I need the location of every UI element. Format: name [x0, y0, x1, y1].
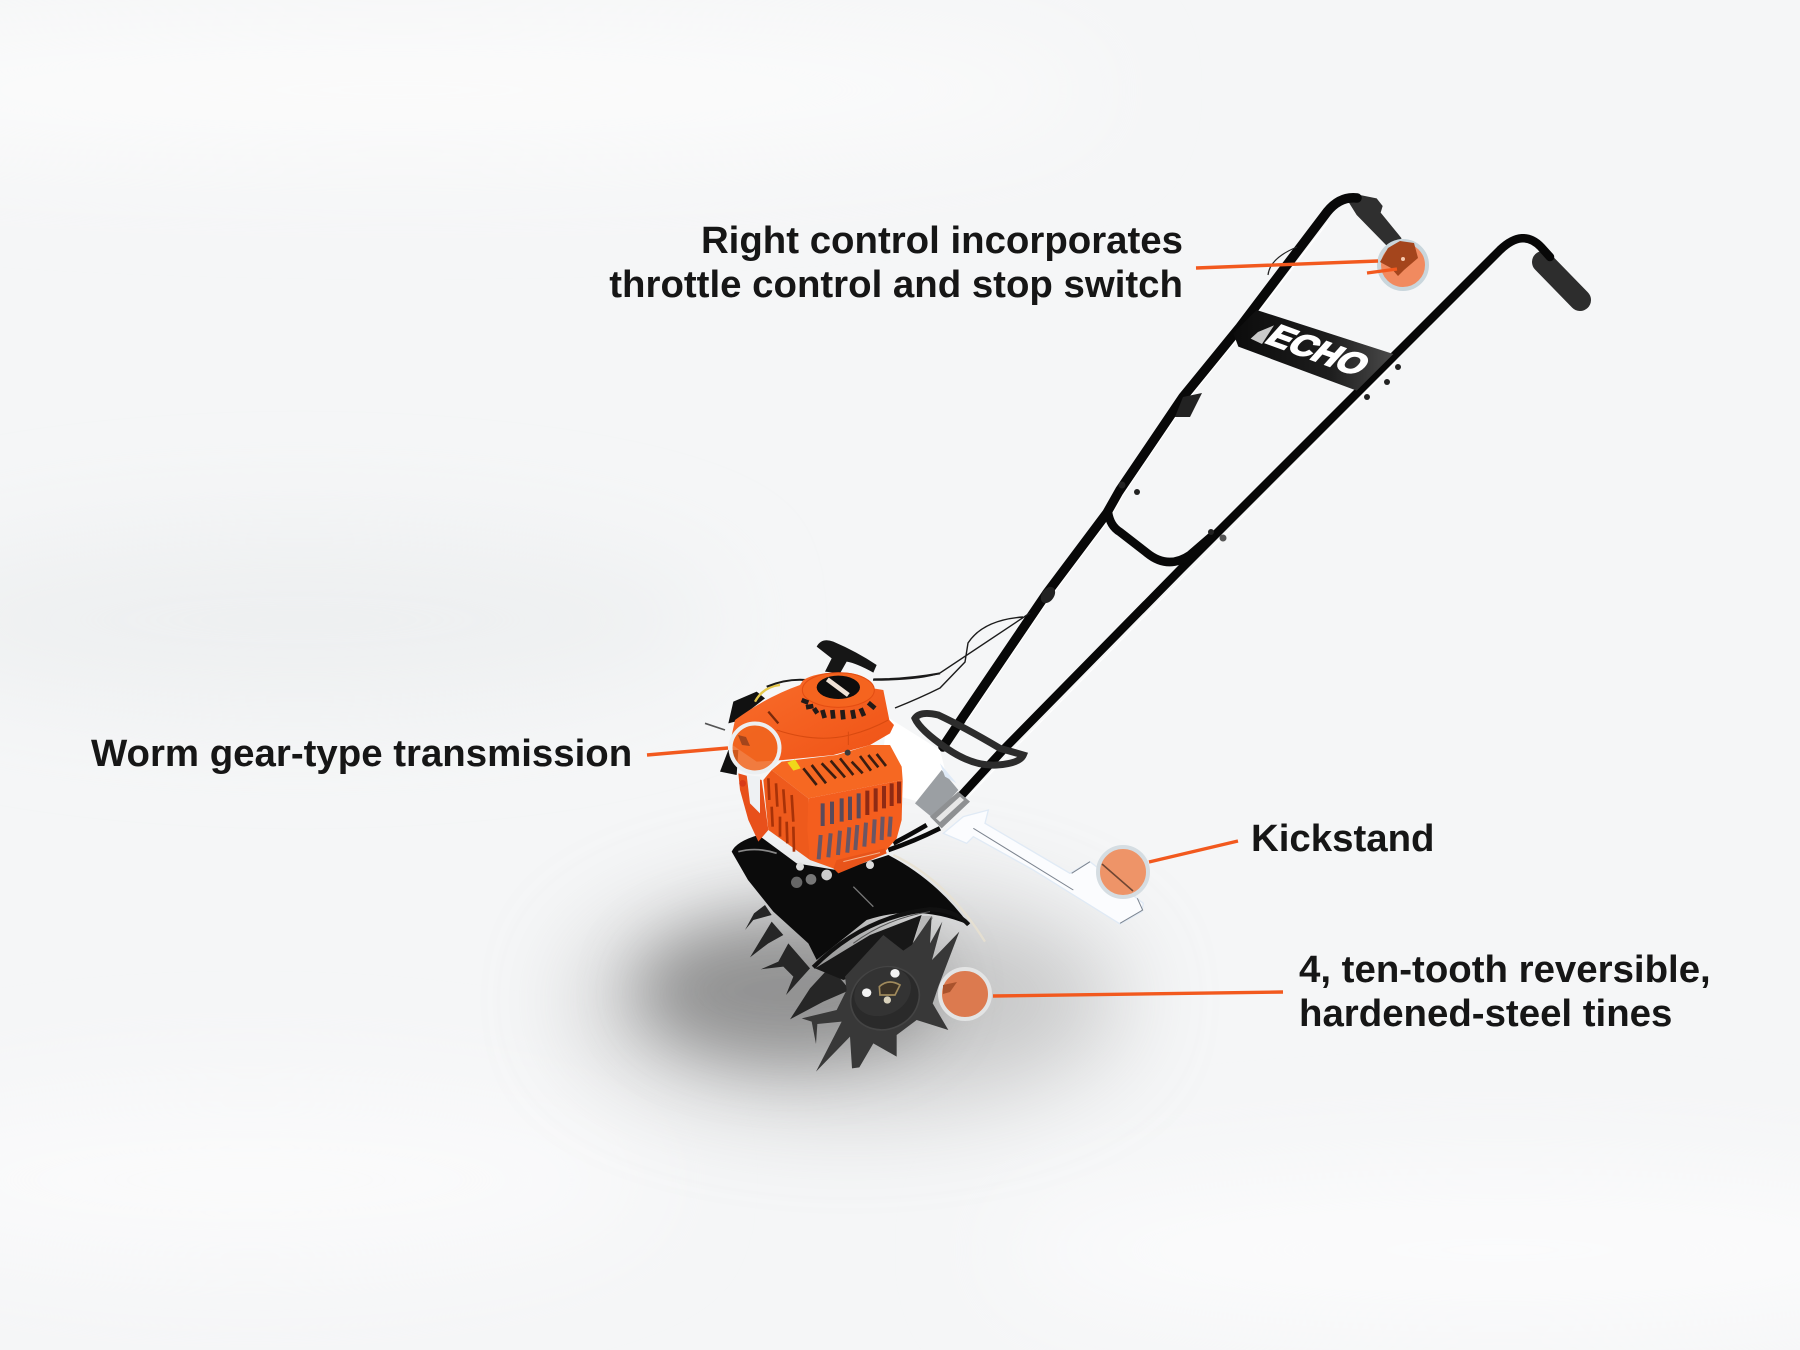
lower U bar [1108, 512, 1212, 562]
marker [1098, 847, 1148, 897]
callout: tines [940, 948, 1711, 1035]
engine cover [730, 673, 894, 762]
tiller base: housing, kickstand, guard [732, 713, 1143, 960]
tine guard [732, 835, 985, 960]
label text: Worm gear-type transmission [91, 732, 632, 775]
leader line [647, 748, 728, 755]
label text: 4, ten-tooth reversible, [1299, 948, 1711, 991]
bolts [791, 861, 874, 888]
label text: Kickstand [1251, 817, 1434, 860]
right grip [1543, 262, 1580, 300]
bracket wedge [915, 770, 958, 818]
leader line [1196, 261, 1397, 273]
callout: worm gear [91, 724, 780, 775]
rope pull handle [817, 640, 877, 673]
leader line [993, 992, 1283, 996]
warning label [787, 759, 801, 771]
inner wheel shadow [815, 915, 933, 980]
back tines [745, 905, 850, 1019]
product: garden tiller [705, 194, 1580, 1072]
right handle tube [960, 238, 1550, 797]
crossbar plate with logo [1233, 310, 1393, 391]
callout: right control [609, 219, 1427, 306]
callout: right control: throttle control and stop switch [609, 263, 1183, 306]
leader line [1149, 841, 1238, 862]
engine [705, 640, 940, 888]
recoil fins [802, 700, 875, 719]
marker [1379, 241, 1427, 289]
left handle tube [943, 198, 1357, 747]
engine case top [772, 745, 903, 798]
engine case front face [807, 780, 903, 873]
transmission housing [883, 717, 947, 802]
kickstand [943, 810, 1143, 924]
callout: tines: hardened-steel tines [1299, 992, 1672, 1035]
lower tube to engine [888, 825, 940, 850]
crossbar plate with logo: ECHO [1258, 320, 1377, 382]
label text: Right control incorporates [701, 219, 1183, 262]
tube clamps and bolts [1038, 364, 1401, 606]
tines [745, 905, 969, 1072]
ground shadow [580, 895, 1120, 1105]
wires [873, 613, 1030, 708]
guard lip [813, 909, 969, 967]
callout: kickstand [1098, 817, 1434, 897]
engine case left face [763, 770, 810, 860]
marker [940, 969, 990, 1019]
marker [730, 724, 780, 772]
left side panel [738, 773, 768, 842]
front tine wheel [802, 916, 959, 1072]
metal collar [930, 792, 970, 828]
handlebar frame [873, 194, 1580, 797]
rear black parts [705, 673, 940, 775]
handle ring [915, 713, 1023, 765]
left grip plate [1348, 194, 1402, 247]
